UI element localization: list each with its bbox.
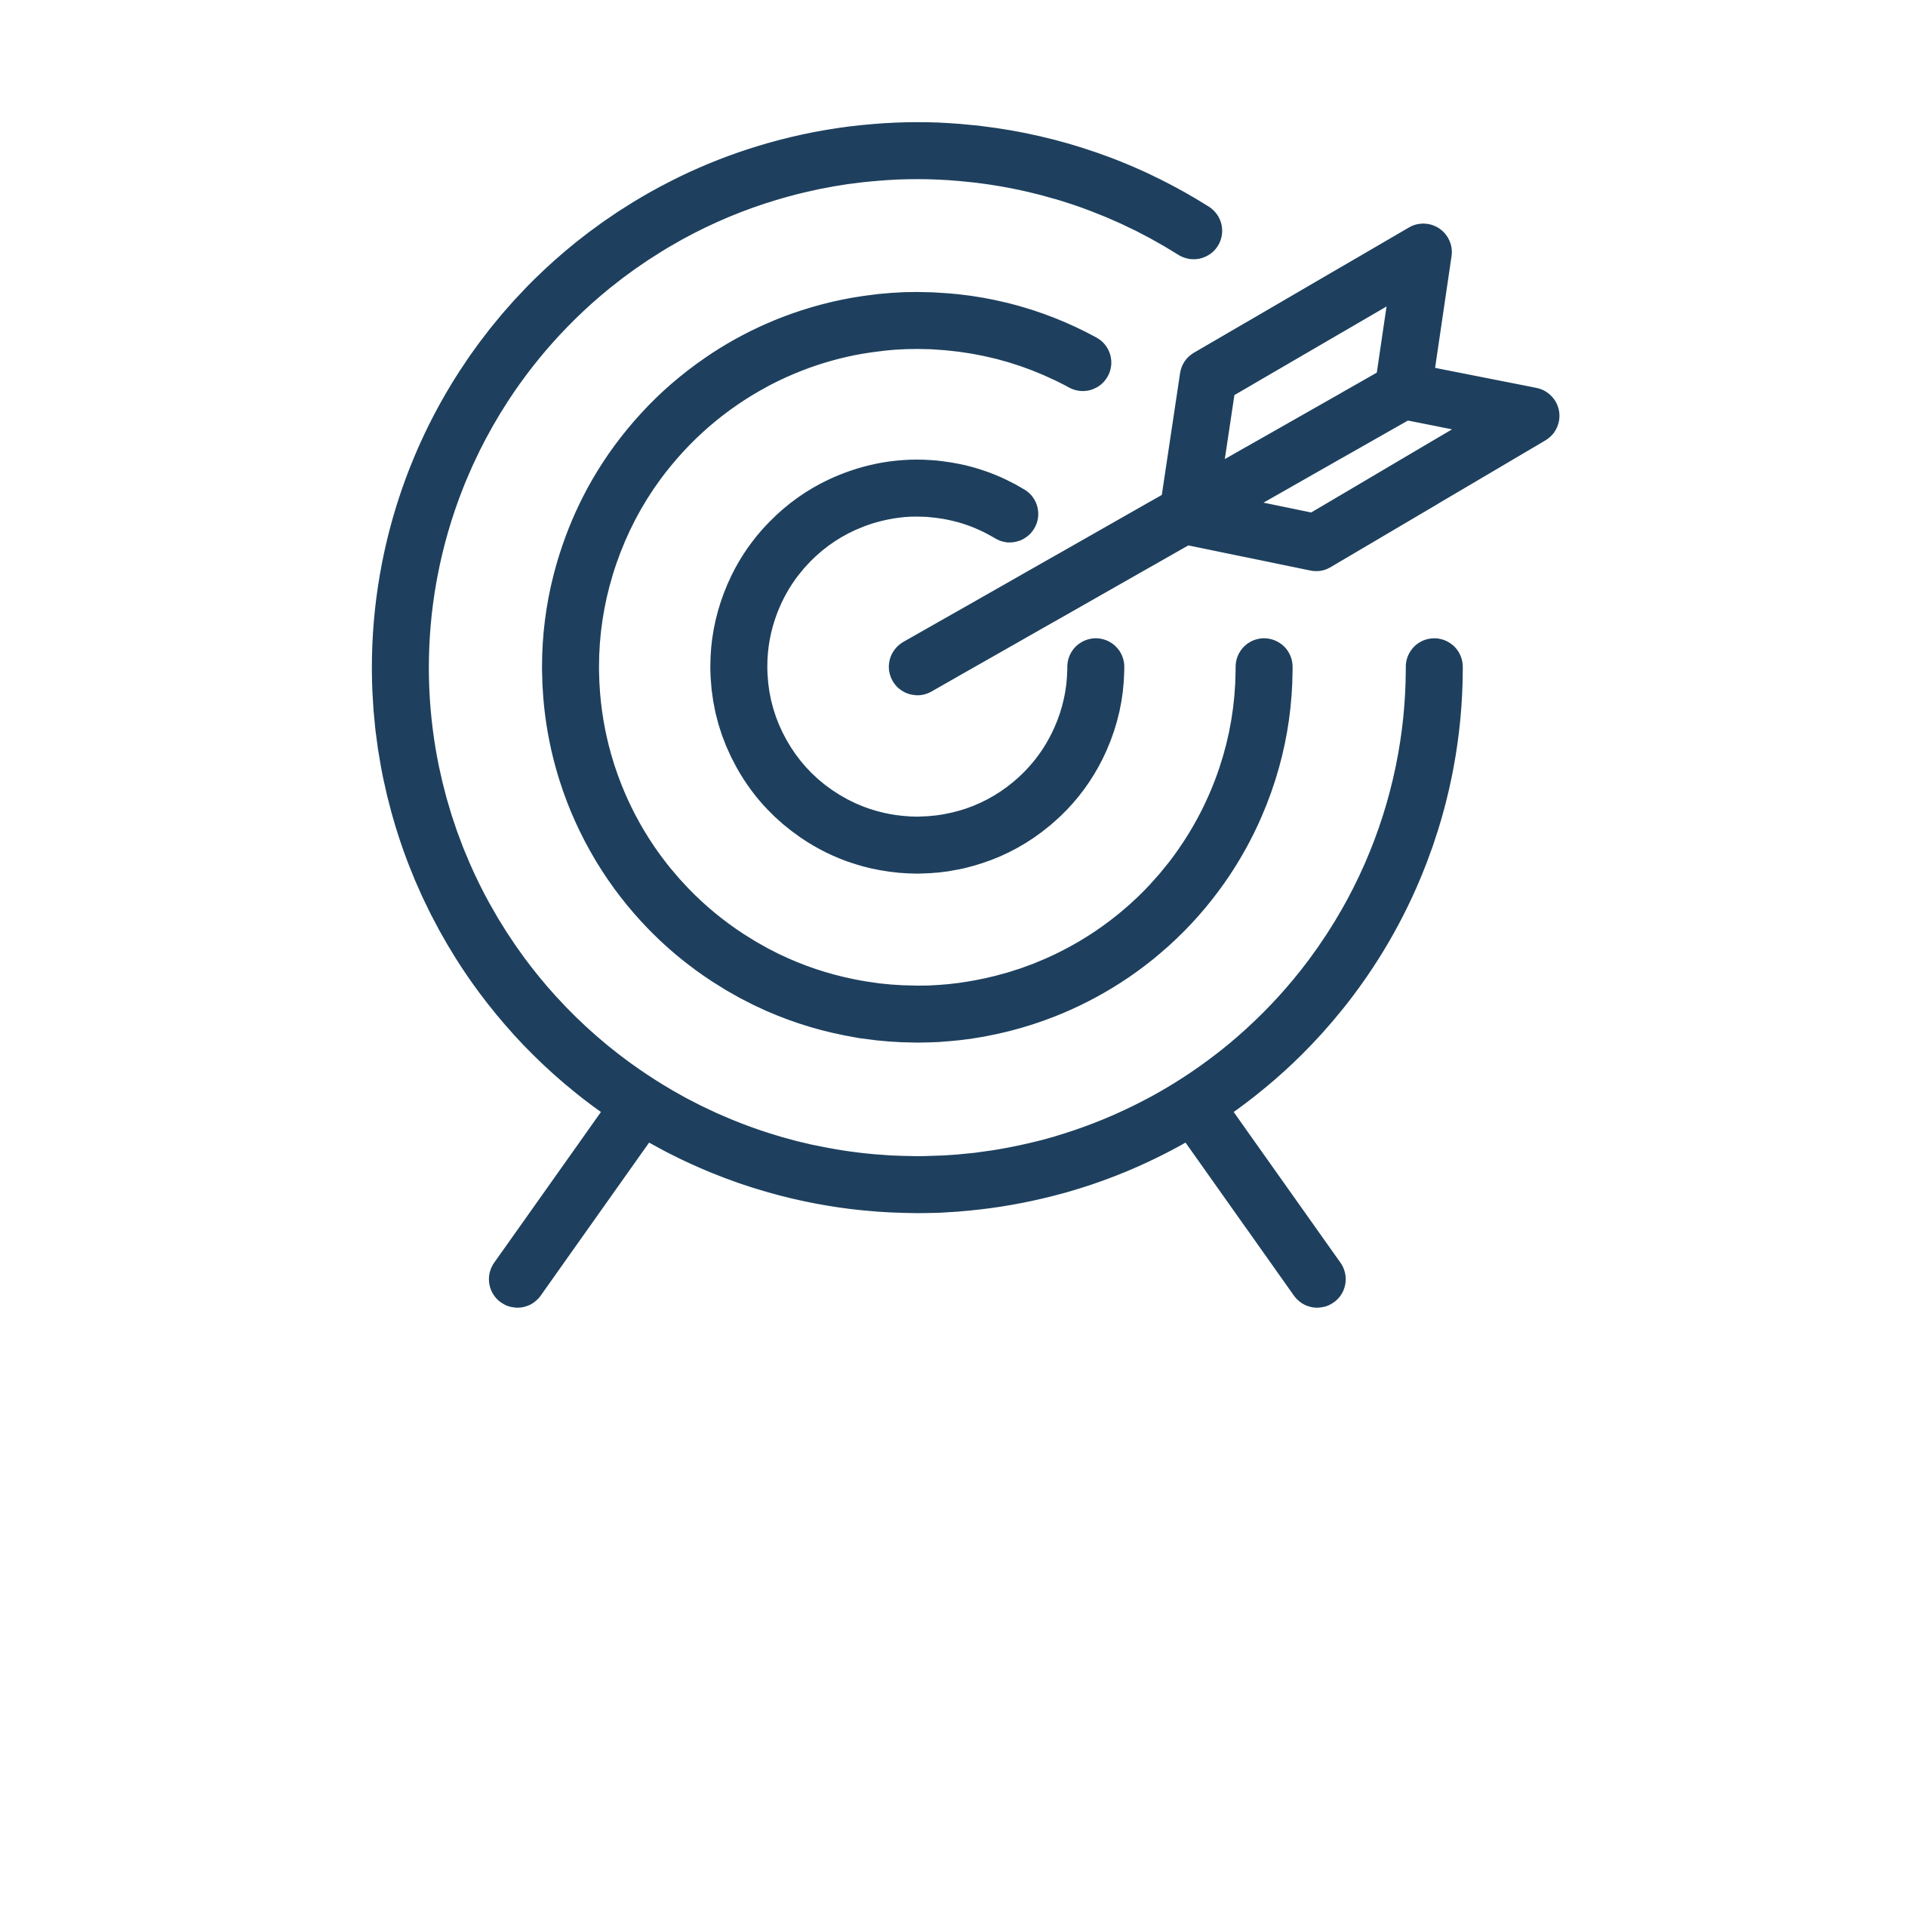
arrow: shaft: [918, 391, 1403, 667]
target outer ring: [401, 151, 1435, 1185]
arrow: lower fletching: [1188, 391, 1531, 543]
target stand: right leg: [1203, 1118, 1317, 1279]
target inner ring: [739, 488, 1096, 845]
target middle ring: [571, 321, 1264, 1014]
arrow: upper fletching: [1188, 252, 1423, 513]
target stand: left leg: [518, 1118, 632, 1279]
